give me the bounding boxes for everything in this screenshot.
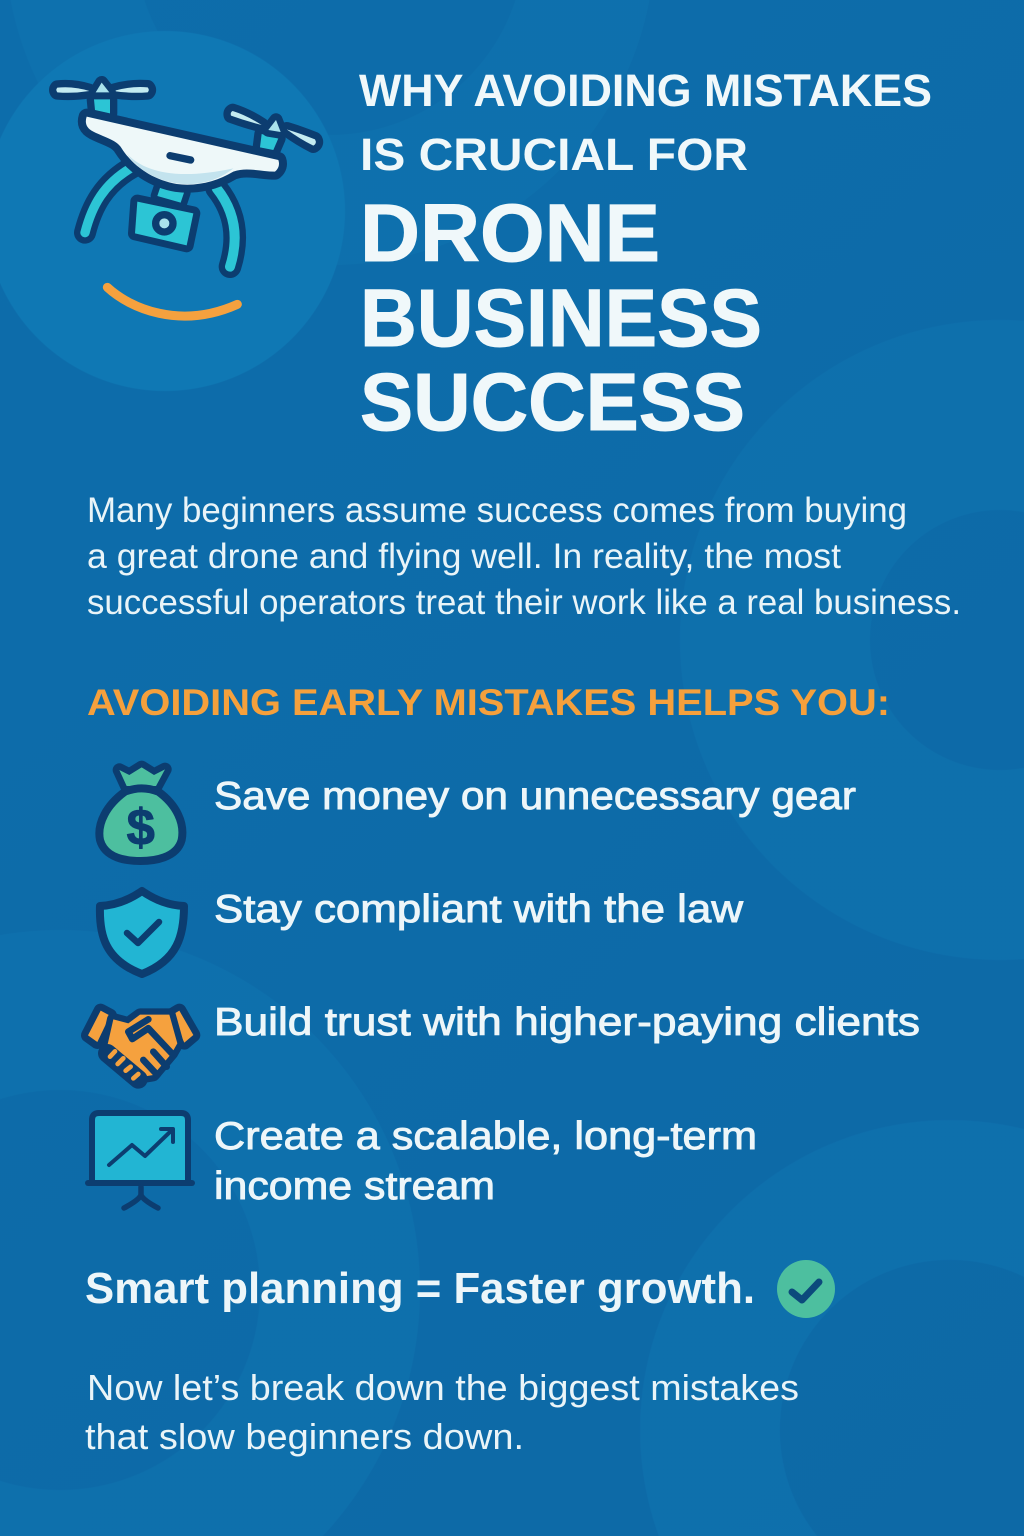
title line 5: SUCCESS [360,357,745,448]
icon: growth chart [88,1113,192,1208]
title line 2: IS CRUCIAL FOR [360,129,748,180]
closing text [85,1367,799,1457]
drone camera [135,186,193,245]
benefit: stay compliant: Stay compliant with the law [214,888,744,931]
icon: money bag: $ [127,798,155,855]
benefit: scalable income [214,1115,757,1208]
section heading: AVOIDING EARLY MISTAKES HELPS YOU: [87,682,890,723]
drone orange arc [107,287,237,316]
takeaway line: Smart planning = Faster growth. [85,1264,755,1313]
title line 4: BUSINESS [360,273,762,364]
icon: green check [777,1260,835,1318]
benefit: scalable income: income stream [214,1165,495,1208]
drone right leg [217,188,235,267]
title line 1: WHY AVOIDING MISTAKES [359,65,932,116]
icon: shield [100,891,184,974]
benefit: build trust: Build trust with higher-paying clients [214,1001,920,1044]
benefit: save money: Save money on unnecessary gear [214,775,856,818]
closing text: that slow beginners down. [85,1416,524,1457]
title [359,65,932,448]
intro paragraph: successful operators treat their work like a real business. [87,583,961,622]
drone left propeller [56,83,149,113]
closing text: Now let’s break down the biggest mistakes [87,1367,799,1408]
icon: drone [56,83,316,316]
drone left leg [85,167,133,233]
drone right propeller [231,111,316,150]
benefit: scalable income: Create a scalable, long-term [214,1115,757,1158]
drone body [86,117,279,185]
intro paragraph [87,491,961,622]
icon: money bag [99,767,182,861]
icon: handshake [88,1011,193,1079]
intro paragraph: Many beginners assume success comes from buying [87,491,907,530]
intro paragraph: a great drone and flying well. In reality, the most [87,537,841,576]
title line 3: DRONE [360,188,660,279]
